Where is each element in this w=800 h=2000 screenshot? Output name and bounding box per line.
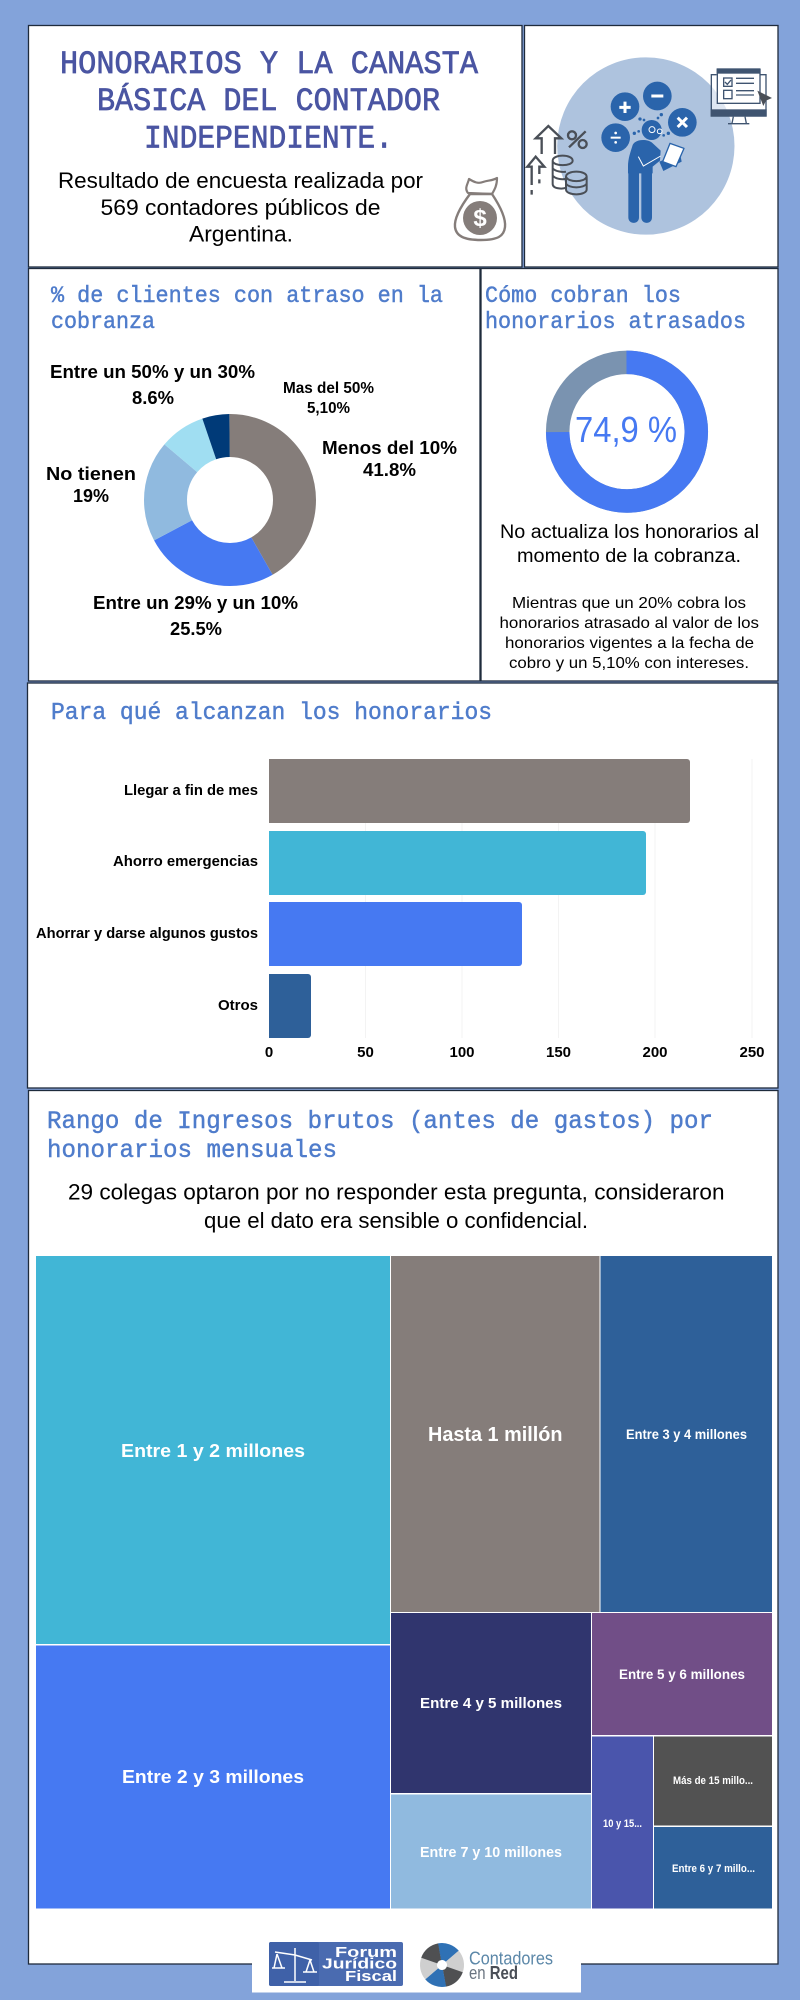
subtitle text: Resultado de encuesta realizada por xyxy=(58,168,423,193)
tile: Más de 15 millones: Más de 15 millo... xyxy=(673,1775,753,1787)
donut labels: No tienen xyxy=(46,464,136,484)
panel: what the fees cover xyxy=(28,683,778,1088)
tile: Entre 5 y 6 millones xyxy=(592,1613,772,1735)
panel: clients with late payment xyxy=(28,268,480,681)
tile: 10 y 15: 10 y 15... xyxy=(603,1818,642,1830)
icon: accountant with math bubbles xyxy=(557,57,734,235)
heading xyxy=(485,283,746,335)
axis tick labels: 100 xyxy=(449,1044,475,1061)
heading xyxy=(47,1107,713,1165)
footer: logos xyxy=(252,1935,581,1992)
axis tick labels: 0 xyxy=(265,1044,273,1061)
icon: money bag xyxy=(455,178,505,240)
donut labels: Mas del 50% xyxy=(283,380,374,397)
note text: que el dato era sensible o confidencial. xyxy=(204,1208,588,1233)
heading: Rango de Ingresos brutos (antes de gastos) por xyxy=(47,1107,713,1136)
tile: Entre 7 y 10 millones: Entre 7 y 10 millones xyxy=(420,1845,562,1861)
tile: Hasta 1 millón: Hasta 1 millón xyxy=(428,1424,562,1446)
donut labels: 25.5% xyxy=(170,619,222,639)
bar: Ahorro emergencias xyxy=(269,831,646,895)
subtitle text xyxy=(58,168,423,246)
donut chart: late payment xyxy=(166,436,294,564)
category labels: Llegar a fin de mes xyxy=(124,782,258,799)
category labels xyxy=(36,782,258,1014)
title: INDEPENDIENTE. xyxy=(144,120,393,158)
secondary statement: honorarios vigentes a la fecha de xyxy=(505,635,754,652)
panel: header title xyxy=(28,26,522,267)
tile: Entre 2 y 3 millones: Entre 2 y 3 millones xyxy=(122,1767,304,1787)
tile: Entre 4 y 5 millones: Entre 4 y 5 millones xyxy=(420,1696,562,1712)
tile: Entre 4 y 5 millones xyxy=(391,1613,591,1793)
logo: Forum Jurídico Fiscal: Forum xyxy=(335,1945,397,1961)
tile: Entre 1 y 2 millones xyxy=(36,1256,390,1644)
heading: Cómo cobran los xyxy=(485,283,681,309)
donut labels: 19% xyxy=(73,486,109,506)
donut chart: 74,9 % xyxy=(558,362,696,501)
treemap xyxy=(36,1256,772,1908)
donut labels: Entre un 50% y un 30% xyxy=(50,362,255,382)
panel: how late fees are charged xyxy=(481,268,778,681)
bar chart xyxy=(36,759,765,1061)
subtitle text: 569 contadores públicos de xyxy=(100,195,380,220)
heading: % de clientes con atraso en la xyxy=(51,283,443,309)
donut labels xyxy=(46,362,457,639)
axis tick labels xyxy=(265,1044,765,1061)
title: HONORARIOS Y LA CANASTA xyxy=(60,46,479,83)
tile: 10 y 15 xyxy=(592,1736,653,1908)
icon: money bag: $ xyxy=(473,205,487,232)
logo: Forum Jurídico Fiscal: Fiscal xyxy=(345,1969,397,1985)
donut labels: 8.6% xyxy=(132,388,174,408)
tile: Más de 15 millones xyxy=(654,1736,772,1826)
secondary statement: Mientras que un 20% cobra los xyxy=(512,595,746,612)
tile: Entre 6 y 7 millones: Entre 6 y 7 millo... xyxy=(672,1863,755,1875)
heading xyxy=(51,283,443,335)
tile: Entre 1 y 2 millones: Entre 1 y 2 millones xyxy=(121,1441,305,1461)
secondary statement: cobro y un 5,10% con intereses. xyxy=(509,655,749,672)
icon: monitor with checklist xyxy=(711,68,772,124)
logo: Contadores en Red: Contadores xyxy=(469,1948,553,1968)
main statement xyxy=(500,522,759,567)
category labels: Ahorro emergencias xyxy=(113,853,258,870)
donut labels: Entre un 29% y un 10% xyxy=(93,593,298,613)
logo: Contadores en Red: en Red xyxy=(469,1963,518,1983)
tile: Entre 2 y 3 millones xyxy=(36,1646,390,1908)
tile: Entre 5 y 6 millones: Entre 5 y 6 millones xyxy=(619,1666,745,1682)
heading: Para qué alcanzan los honorarios xyxy=(51,700,492,727)
donut labels: 5,10% xyxy=(307,400,350,417)
axis tick labels: 200 xyxy=(642,1044,668,1061)
icon: aperture xyxy=(423,1946,461,1984)
donut labels: 41.8% xyxy=(363,460,416,480)
bar: Llegar a fin de mes xyxy=(269,759,690,823)
axis tick labels: 150 xyxy=(546,1044,571,1061)
donut labels: Menos del 10% xyxy=(322,438,457,458)
bar: Otros xyxy=(269,974,311,1038)
tile: Entre 6 y 7 millones xyxy=(654,1827,772,1908)
heading: cobranza xyxy=(51,309,155,335)
logo: Contadores en Red xyxy=(423,1946,553,1984)
title xyxy=(60,46,479,158)
subtitle text: Argentina. xyxy=(189,222,293,246)
logo: Forum Jurídico Fiscal: Jurídico xyxy=(322,1956,397,1972)
donut center value: 74,9 % xyxy=(575,409,677,450)
icon: rising arrows, percent and coins xyxy=(527,126,587,195)
note text xyxy=(68,1180,724,1233)
panel: gross income range xyxy=(28,1090,778,1964)
category labels: Ahorrar y darse algunos gustos xyxy=(36,925,258,942)
main statement: momento de la cobranza. xyxy=(517,546,741,567)
bar: Ahorrar y darse algunos gustos xyxy=(269,902,522,966)
category labels: Otros xyxy=(218,997,258,1014)
axis tick labels: 250 xyxy=(739,1044,765,1061)
logo: Forum Jurídico Fiscal xyxy=(269,1942,403,1986)
tile: Entre 7 y 10 millones xyxy=(391,1794,591,1908)
heading: honorarios atrasados xyxy=(485,309,746,335)
tile: Entre 3 y 4 millones: Entre 3 y 4 millones xyxy=(626,1427,747,1442)
secondary statement xyxy=(500,595,759,672)
main statement: No actualiza los honorarios al xyxy=(500,522,759,543)
title: BÁSICA DEL CONTADOR xyxy=(97,83,440,120)
panel: header illustration xyxy=(524,26,778,267)
secondary statement: honorarios atrasado al valor de los xyxy=(500,615,759,632)
note text: 29 colegas optaron por no responder esta pregunta, consideraron xyxy=(68,1180,724,1204)
axis tick labels: 50 xyxy=(357,1044,374,1061)
tile: Hasta 1 millón xyxy=(391,1256,600,1612)
tile: Entre 3 y 4 millones xyxy=(600,1256,772,1612)
heading: honorarios mensuales xyxy=(47,1136,337,1165)
